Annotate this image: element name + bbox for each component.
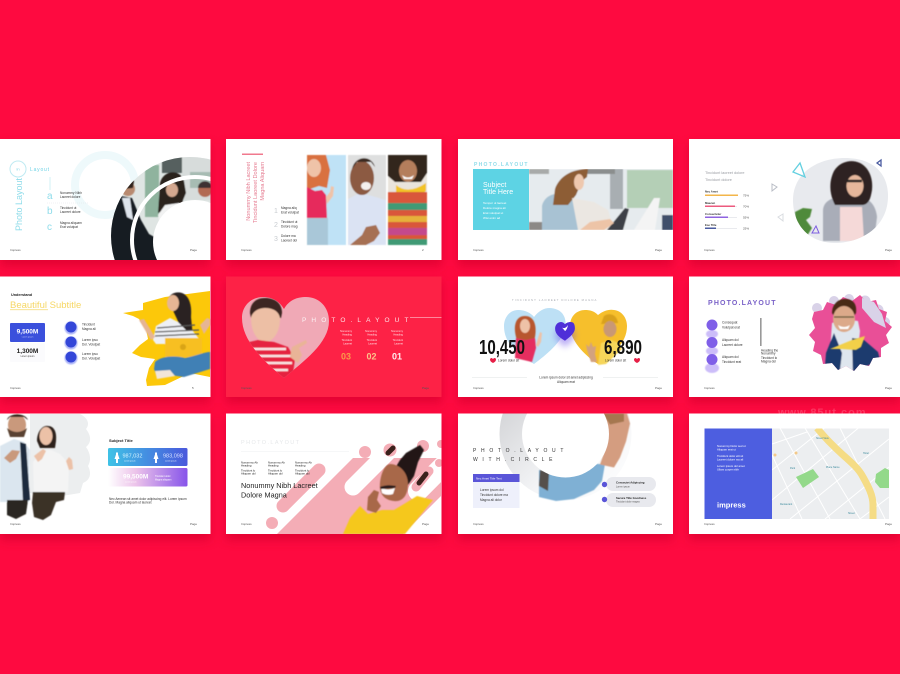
- callout: purple box: [473, 474, 520, 508]
- footer: [473, 522, 662, 526]
- callout: cyan subject box: Dolore magna ali: [483, 206, 506, 210]
- callout: purple box: Nec Amet Title Text: [476, 476, 502, 480]
- panel: slide 3 subject box and laptop photo: [458, 139, 673, 260]
- photo: woman with glasses in blob: [793, 158, 888, 243]
- icon: purple twitter heart: [555, 322, 575, 347]
- slide shadows: [0, 144, 900, 540]
- footer: Page: [885, 522, 892, 526]
- list: a b c: Nonummy Nibh: [60, 191, 82, 195]
- caption: Aliquam erat: [557, 380, 575, 384]
- footer: Impress: [10, 248, 21, 252]
- stat: 10,450: Lorem dolor sit: [498, 358, 519, 362]
- list: a b c: a: [47, 191, 53, 202]
- list: a b c: Magna aliquam: [60, 221, 82, 225]
- footer: Page: [190, 248, 197, 252]
- icons: purple numbered list: Laoreet dolore: [722, 343, 743, 347]
- text block: Nec Aenean sit amet dolor adipiscing elit. Lorem ipsum: [109, 497, 187, 501]
- heading: PHOTO.LAYOUT: [302, 317, 414, 324]
- panel: slide 9 gradient stat cards: [0, 414, 210, 534]
- text columns: Tincidunt lo: [295, 468, 310, 472]
- footer: Page: [885, 386, 892, 390]
- heading: layout: Layout: [30, 167, 50, 173]
- list: numbered items: 1: [274, 208, 278, 215]
- icons: purple numbered list: Tincidunt erat: [722, 360, 741, 364]
- panel: slide 1 circle photo layout: [0, 139, 210, 260]
- list: a b c: [47, 177, 89, 233]
- list: a b c: b: [47, 206, 53, 217]
- icons: purple numbered list: Consequat: [722, 320, 738, 324]
- footer: Page: [422, 386, 429, 390]
- footer: [704, 248, 892, 252]
- footer: [473, 386, 662, 390]
- text columns: Aliquam dol: [241, 472, 256, 476]
- text columns: Aliquam dol: [295, 472, 310, 476]
- text columns: Nonummy Ab: [268, 460, 285, 464]
- text columns: Nonummy: [365, 329, 378, 333]
- stat: 6,890: [604, 337, 642, 363]
- photo: ring with man: [500, 414, 631, 502]
- panel: slide 7 twitter hearts stats: [458, 276, 673, 397]
- footer: [473, 248, 662, 252]
- list: numbered items: Dolore ma: [281, 234, 296, 238]
- callout: pill two: Tincidunt dolor magna: [616, 500, 640, 504]
- footer: [241, 386, 429, 390]
- text block: [109, 497, 187, 504]
- list: numbered items: 2: [274, 222, 278, 229]
- panel: slide 11 photo with circle: [458, 414, 673, 534]
- footer: Impress: [241, 386, 252, 390]
- footer: Impress: [10, 386, 21, 390]
- text: big statement: Dolore Magna: [241, 490, 288, 500]
- heading: vertical pink title: Tincidunt Laoreet Dolore: [253, 162, 259, 223]
- list: a b c: Laoreet dolore: [60, 210, 81, 214]
- panel: slide 5 yellow brush and stats: [0, 276, 210, 397]
- accent line: [242, 154, 263, 155]
- divider and side note: Nonummy: [761, 352, 776, 356]
- footer: Impress: [704, 248, 715, 252]
- heading: TINCIDUNT LAOREET DOLORE MAGNA: [512, 298, 597, 302]
- photo: woman on laptop: [529, 169, 673, 230]
- photo: blue heart with woman: [504, 308, 566, 364]
- icons: blue circles list: Magna ali: [82, 327, 96, 331]
- icons: blue circles list: Dol. Volutpat: [82, 342, 100, 346]
- stat card: two figures: Lorem ipsum: [165, 460, 177, 462]
- stat: 6,890: Lorem dolor sit: [605, 358, 626, 362]
- heading: WITH.CIRCLE: [473, 457, 557, 463]
- icons: purple numbered list: Aliquam dol: [722, 355, 739, 359]
- text columns: Laoreet: [343, 342, 352, 346]
- list: numbered items: Laoreet dol: [281, 238, 297, 242]
- text block: Dol. Magna aliquam ut laoreet: [109, 500, 152, 504]
- text columns: Nonummy Ab: [241, 460, 258, 464]
- text columns: Nonummy Ab: [295, 460, 312, 464]
- stat card: two figures: [108, 448, 188, 466]
- icons: purple numbered list: Volutpat erat: [722, 326, 740, 330]
- footer: Impress: [704, 386, 715, 390]
- panel: blue info box: Nonummy Dolor sed ut: [717, 444, 746, 448]
- divider and side note: Heading the: [761, 348, 778, 352]
- text columns: Heading: [342, 332, 353, 336]
- photo: business people in circle: [111, 157, 210, 260]
- stat card: 99,500m: Magna aliquam: [155, 478, 171, 482]
- numbers: 03: [341, 352, 351, 362]
- heading: vertical pink title: Magna Aliquam: [260, 162, 266, 201]
- panel: blue info box: impress: [717, 500, 746, 510]
- photo: laughing man in yellow hoodie: [343, 445, 433, 534]
- list: numbered items: Dolore mag: [281, 224, 298, 228]
- callout: cyan subject box: Erat volutpat ut: [483, 211, 503, 215]
- caption: [472, 376, 658, 384]
- text columns: Nonummy: [391, 329, 404, 333]
- panel: slide 8 purple list and gear portrait: [689, 276, 900, 397]
- text columns: Laoreet: [394, 342, 403, 346]
- footer: [10, 522, 197, 526]
- footer: Page: [885, 248, 892, 252]
- icons: blue circles list: [64, 322, 100, 364]
- stat card: 99,500m: [108, 468, 188, 486]
- numbers: 01: [392, 352, 402, 362]
- stat: 10,450: 10,450: [479, 337, 525, 359]
- footer: [704, 386, 892, 390]
- icons: blue circles list: Lorem ipsu: [82, 352, 98, 356]
- footer: [241, 522, 429, 526]
- list: numbered items: 3: [274, 236, 278, 243]
- footer: Impress: [704, 522, 715, 526]
- list: numbered items: Magna aliq: [281, 206, 297, 210]
- divider and side note: [760, 318, 778, 364]
- heading: [705, 171, 745, 182]
- icon: circle badge: in: [16, 166, 20, 172]
- bar chart: progress bars: 70%: [743, 204, 749, 208]
- callout: purple box: Tincidunt dolore ma: [480, 493, 508, 497]
- icons: blue circles list: Lorem ipsu: [82, 338, 98, 342]
- numbers: 02: [366, 352, 377, 362]
- panel: blue info box: Laoreet dolore ma ali: [717, 458, 744, 462]
- photo: red-haired woman: [307, 155, 346, 245]
- bar chart: progress bars: 25%: [743, 226, 749, 230]
- heading: vertical pink title: [246, 162, 266, 223]
- stat card: 99,500m: 99,500M: [123, 474, 148, 480]
- bar chart: progress bars: [705, 190, 749, 230]
- map: parks: [796, 468, 889, 488]
- map: [772, 422, 889, 519]
- footer: Impress: [241, 248, 252, 252]
- photo: man and woman pointing: [0, 414, 90, 520]
- text: big statement: Nonummy Nibh Lacreet: [241, 481, 318, 490]
- bar chart: progress bars: Nec Amet: [705, 190, 718, 194]
- callout: pill one: [602, 477, 656, 491]
- footer: Page: [422, 522, 429, 526]
- text columns: [241, 460, 312, 476]
- heading: PHOTO.LAYOUT: [708, 300, 777, 307]
- divider and side note: Magna dol: [761, 360, 776, 364]
- map: Park: [790, 467, 796, 470]
- callout: cyan subject box: Wisi enim ad: [483, 216, 501, 220]
- illustration: yellow brush strokes: [123, 291, 210, 386]
- footer: [241, 248, 424, 252]
- bar chart: progress bars: 55%: [743, 216, 749, 220]
- callout: pill two: [602, 493, 656, 507]
- bar chart: progress bars: Maecen: [705, 201, 716, 205]
- callout: cyan subject box: Title Here: [483, 189, 513, 196]
- callout: cyan subject box: Subject: [483, 182, 506, 189]
- map: Restaurant: [780, 503, 793, 506]
- callout: cyan subject box: Tempor ut laoreet: [483, 201, 507, 205]
- stat card: 9,500M: Lorem ipsum: [22, 336, 34, 338]
- icon: triangles: [772, 160, 881, 233]
- list: numbered items: [274, 206, 299, 243]
- photo: man with paper plane in gear: [809, 294, 892, 371]
- stat card: 99,500m: Tincidunt dolor: [155, 475, 171, 478]
- list: numbered items: Tincidunt ut: [281, 220, 297, 224]
- heading: [473, 448, 568, 463]
- callout: cyan subject box: [473, 169, 529, 230]
- text columns: [340, 329, 404, 346]
- list: a b c: c: [47, 222, 52, 233]
- text columns: Heading: [268, 464, 279, 468]
- panel: slide 6 red heart photo: [226, 276, 442, 397]
- map: Street View: [816, 437, 829, 440]
- stat card: 1,300M: 1,300M: [17, 348, 38, 355]
- panel: slide 10 pink diagonal shapes: [226, 414, 458, 534]
- heading: vertical photo layout: Photo Layout: [14, 177, 24, 231]
- heading: Subject Title: [109, 438, 133, 443]
- footer: Page: [655, 522, 662, 526]
- footer: Impress: [473, 386, 484, 390]
- stat card: 99,500m: Lorem ipsum: [125, 482, 137, 484]
- text columns: Heading: [295, 464, 306, 468]
- footer: 5: [192, 386, 194, 390]
- illustration: pink diagonals: [266, 440, 442, 534]
- stat card: 9,500M: [10, 323, 45, 342]
- list: a b c: Lacreet dolore: [60, 195, 81, 199]
- heading: PHOTO.LAYOUT: [241, 440, 300, 446]
- watermark: www.85ut.com: [777, 407, 867, 419]
- slide deck overview: [0, 139, 900, 542]
- panel: blue info box: Aliquam erat ut: [717, 448, 736, 452]
- list: a b c: Tincidunt ut: [60, 206, 76, 210]
- text columns: Tincidunt: [367, 338, 377, 342]
- text columns: Aliquam dol: [268, 472, 283, 476]
- heading: PHOTO.LAYOUT: [474, 162, 529, 168]
- text columns: Tincidunt lo: [241, 468, 256, 472]
- heading: PHOTO.LAYOUT: [473, 448, 568, 454]
- text: big statement: [241, 481, 318, 500]
- footer: 2: [422, 248, 424, 252]
- numbers: [341, 352, 402, 362]
- text columns: Heading: [241, 464, 252, 468]
- stat card: two figures: 987,032: [122, 454, 142, 460]
- footer: Impress: [10, 522, 21, 526]
- panel: slide 12 map: [689, 414, 900, 534]
- photo: woman with yellow laptop: [139, 292, 210, 379]
- caption: Lorem ipsum dolor sit amet adipiscing: [539, 376, 593, 380]
- list: numbered items: Erat volutpat: [281, 210, 299, 214]
- icons: purple numbered list: [705, 320, 743, 373]
- icons: blue circles list: Tincidunt: [82, 322, 95, 326]
- map: yellow highway: [817, 428, 873, 519]
- callout: purple box: Magna ali dolor: [480, 498, 503, 502]
- icons: blue circles list: Dol. Volutpat: [82, 356, 100, 360]
- stat card: two figures: 983,098: [163, 454, 183, 460]
- panel: blue info box: Lorem ipsum dol amet: [717, 464, 745, 468]
- heading: beautiful subtitle: Beautiful Subtitle: [10, 300, 81, 311]
- callout: pill two: Secure Title Goodness: [616, 496, 647, 500]
- bar chart: progress bars: Ese Title: [705, 223, 717, 227]
- stat card: 1,300M: [10, 343, 45, 362]
- heading: Tincidunt dolore: [705, 178, 732, 182]
- photo: woman in striped sweater: [388, 155, 427, 245]
- text columns: Tincidunt: [393, 338, 403, 342]
- bar chart: progress bars: Consectetur: [705, 212, 722, 216]
- footer: Impress: [473, 522, 484, 526]
- footer: [10, 248, 197, 252]
- footer: Page: [655, 386, 662, 390]
- photo: yellow heart with man: [570, 310, 627, 365]
- footer: Impress: [473, 248, 484, 252]
- footer: [704, 522, 892, 526]
- footer: Page: [190, 522, 197, 526]
- map: Place Name: [826, 466, 840, 469]
- footer: Impress: [241, 522, 252, 526]
- photo: laughing man: [348, 155, 386, 245]
- panel: slide 4 progress bars and portrait blob: [689, 139, 900, 260]
- stat card: 1,300M: Lorem ipsum: [21, 355, 34, 358]
- text columns: Nonummy: [340, 329, 353, 333]
- panel: blue info box: [704, 428, 772, 519]
- map: Hotel: [863, 452, 869, 455]
- map: Street: [848, 512, 855, 515]
- callout: pill one: Lorem ipsum: [616, 486, 630, 488]
- icons: purple numbered list: Aliquam dol: [722, 338, 739, 342]
- heading: understand: Understand: [11, 293, 33, 297]
- text columns: Tincidunt lo: [268, 468, 283, 472]
- text columns: Laoreet: [368, 342, 377, 346]
- heading: vertical pink title: Nonummy Nibh Lacreet: [246, 162, 252, 221]
- footer: Page: [655, 248, 662, 252]
- callout: pill one: Consectet Adipiscing: [616, 480, 645, 484]
- text columns: Heading: [393, 332, 404, 336]
- text columns: Tincidunt: [342, 338, 352, 342]
- icon: circle badge: [10, 161, 26, 177]
- photo: woman in heart: [240, 297, 329, 381]
- footer: [10, 386, 194, 390]
- panel: blue info box: Tincidunt dolor elit sit: [717, 454, 743, 458]
- heading: Tincidunt laoreet dolore: [705, 171, 745, 175]
- bar chart: progress bars: 75%: [743, 194, 749, 198]
- panel: slide 2 three portraits: [226, 139, 442, 260]
- panel: blue info box: Ullam corper nibh: [717, 468, 739, 472]
- text columns: Heading: [367, 332, 378, 336]
- stat: 10,450: [479, 337, 525, 363]
- list: a b c: Erat volutpat: [60, 225, 78, 229]
- stat card: two figures: Lorem ipsum: [124, 460, 136, 462]
- callout: purple box: Lorem ipsum dol: [480, 488, 504, 492]
- stat: 6,890: 6,890: [604, 337, 642, 359]
- divider and side note: Tincidunt lo: [761, 356, 777, 360]
- stat card: 9,500M: 9,500M: [17, 328, 38, 336]
